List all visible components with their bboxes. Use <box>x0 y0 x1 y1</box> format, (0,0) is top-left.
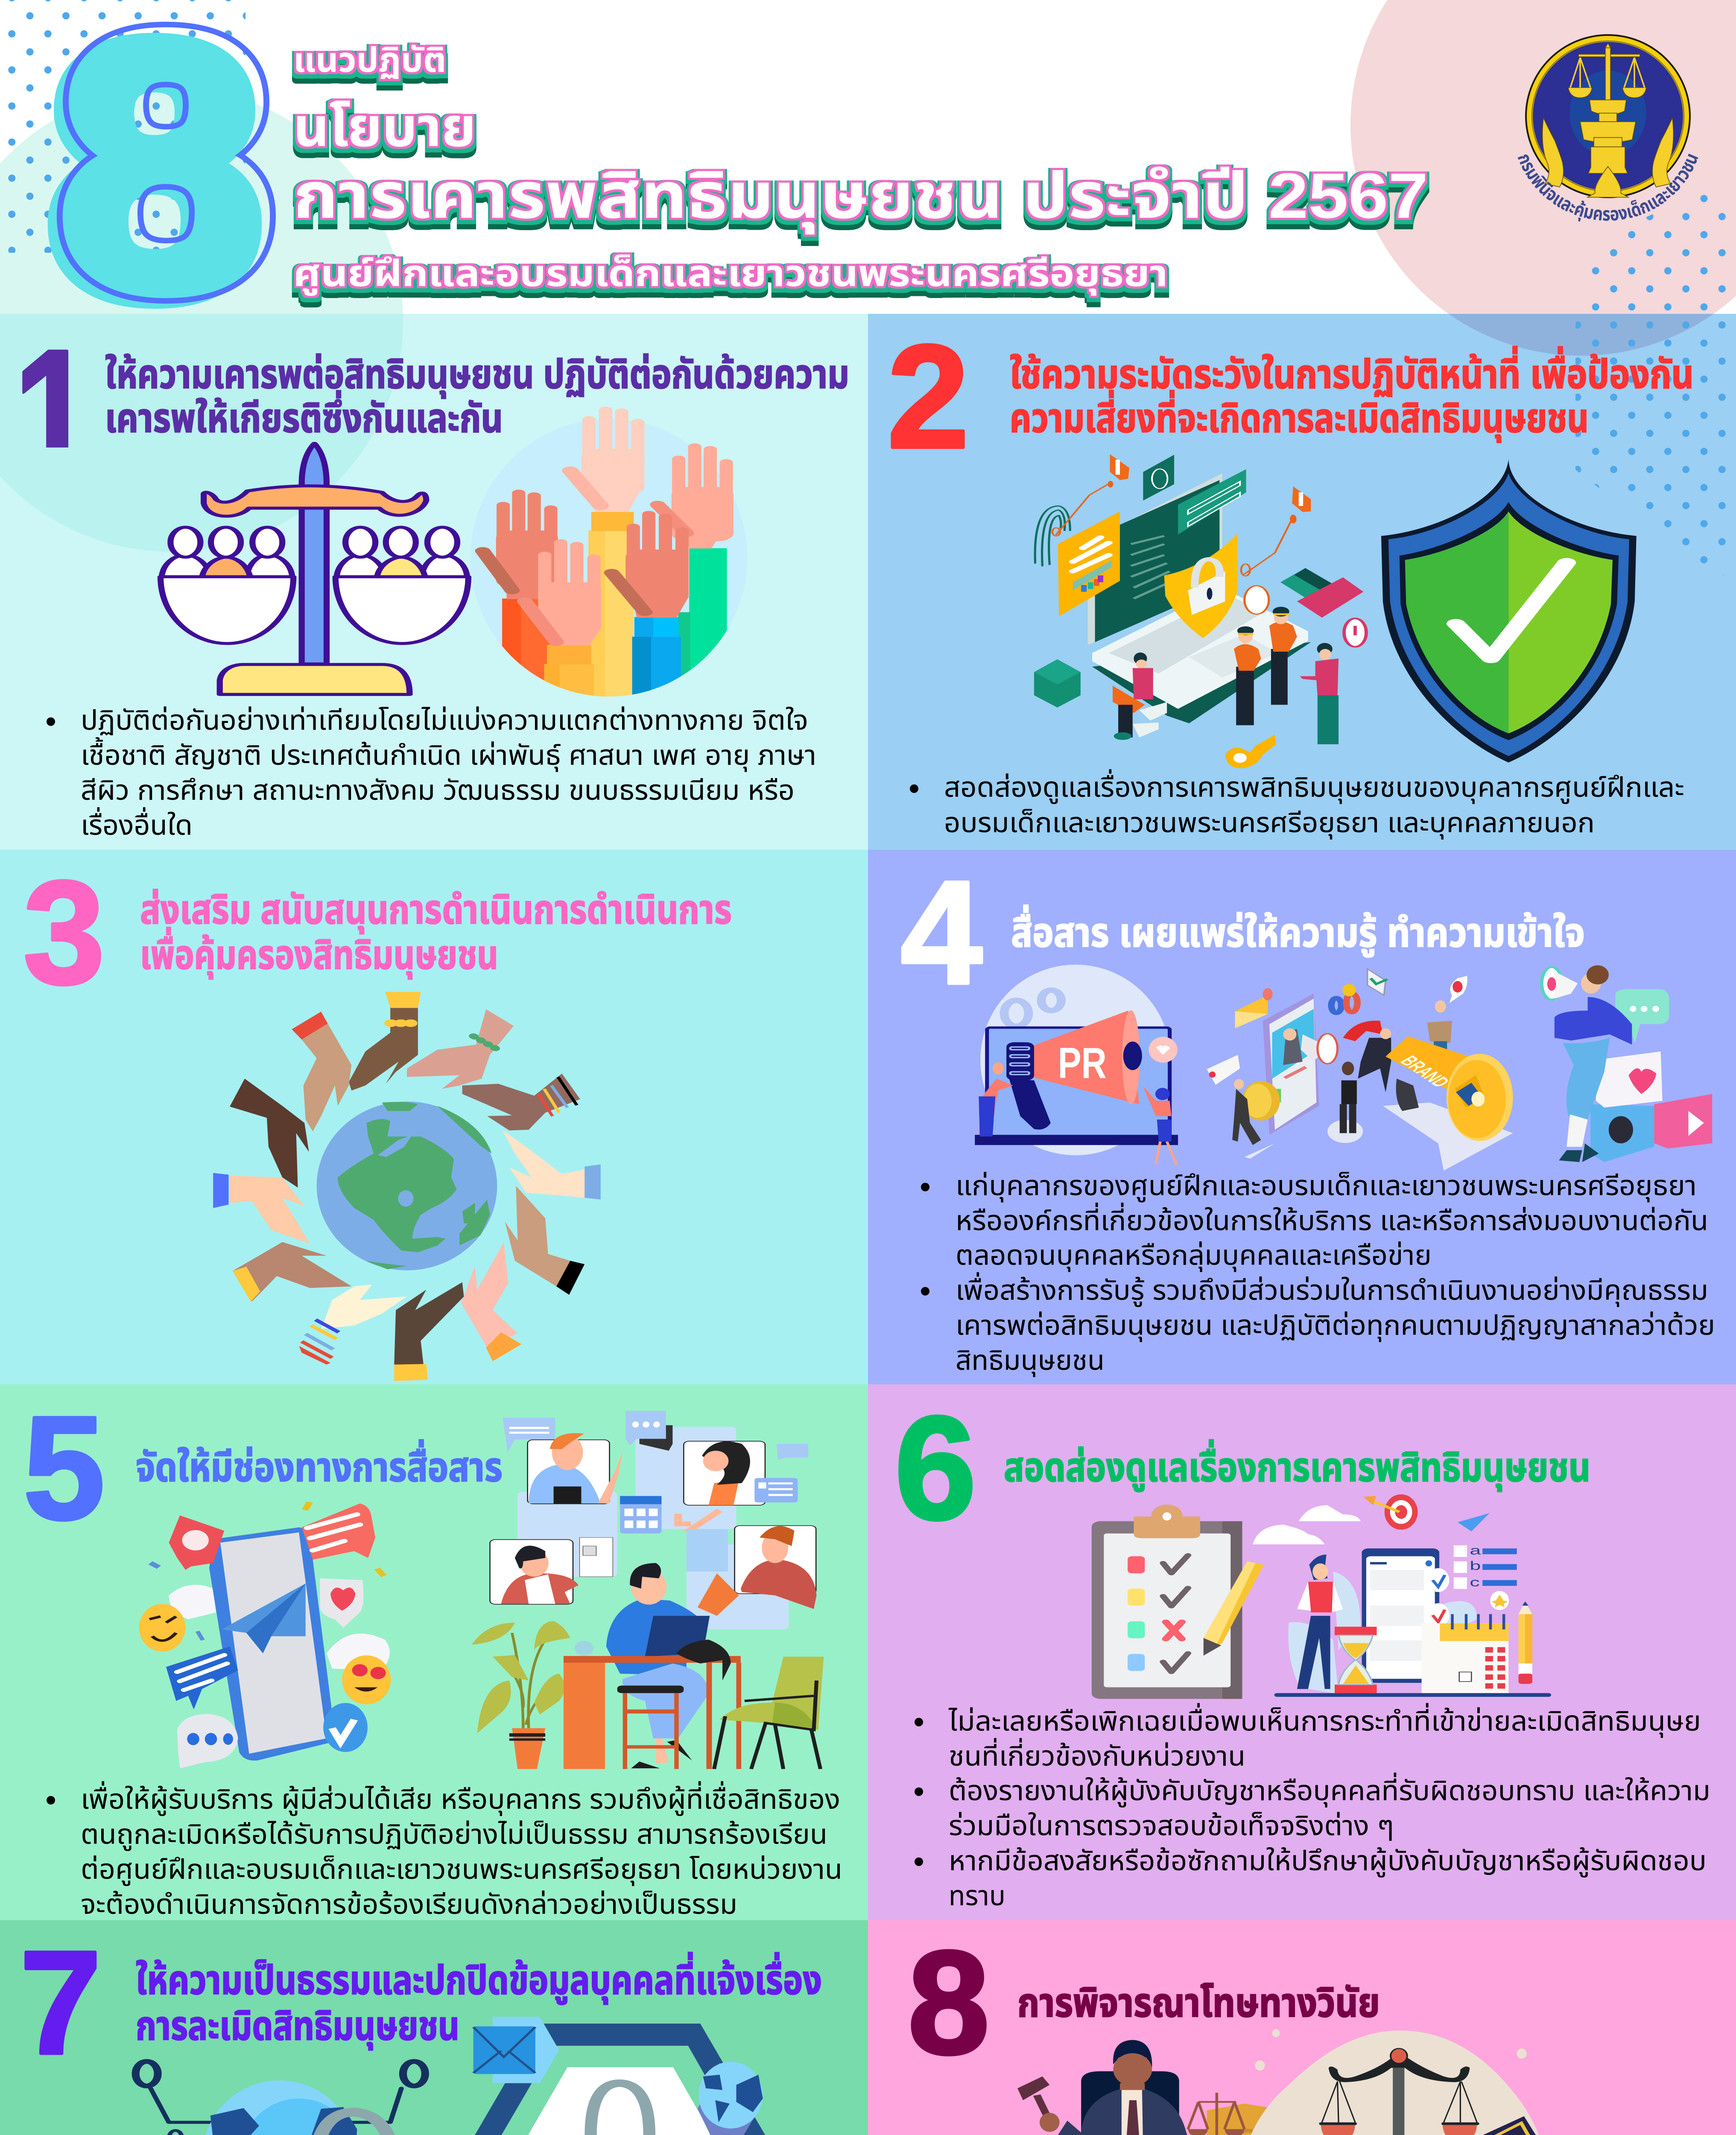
body text 2 <box>910 769 1684 839</box>
illustration: cyber security laptop <box>1034 454 1366 768</box>
body text 5: เพื่อให้ผู้รับบริการ ผู้มีส่วนได้เสีย หรือบุคลากร รวมถึงผู้ที่เชื่อสิทธิของ <box>81 1781 840 1816</box>
illustration: security hexagon with padlock <box>459 2017 780 2135</box>
number 1: 1 <box>14 311 94 521</box>
heading 2 <box>1010 346 1694 443</box>
body text 6: ร่วมมือในการตรวจสอบข้อเท็จจริงต่าง ๆ <box>949 1810 1394 1841</box>
plant <box>472 1621 570 1769</box>
illustration: clipboard checklist <box>1092 1504 1264 1699</box>
twelve hands <box>213 992 601 1381</box>
header banner <box>0 0 1736 552</box>
globe <box>317 1102 497 1270</box>
header main title: การเคารพสิทธิมนุษยชน ประจำปี 2567 <box>293 160 1428 234</box>
heading 8: การพิจารณาโทษทางวินัย <box>1017 1980 1380 2025</box>
body text 5: จะต้องดำเนินการจัดการข้อร้องเรียนดังกล่าวอย่างเป็นธรรม <box>81 1889 737 1920</box>
illustration: phone with social icons <box>139 1501 391 1768</box>
illustration: online meeting people <box>472 1411 824 1769</box>
illustration: man with phone, calendar and hourglass <box>1253 1494 1551 1697</box>
heading 7: ให้ความเป็นธรรมและปกปิดข้อมูลบุคคลที่แจ้งเรื่อง <box>136 1952 822 2005</box>
panel 2: caution <box>868 0 1736 850</box>
heading 3 <box>140 887 732 980</box>
body text 6: หากมีข้อสงสัยหรือข้อซักถามให้ปรึกษาผู้บังคับบัญชาหรือผู้รับผิดชอบ <box>949 1845 1707 1878</box>
illustration: judge at podium <box>1017 2040 1287 2135</box>
body text 5: ตนถูกละเมิดหรือได้รับการปฏิบัติอย่างไม่เป็นธรรม สามารถร้องเรียน <box>81 1819 827 1851</box>
panel 8: discipline <box>868 1920 1736 2135</box>
icon: department logo <box>1513 34 1703 225</box>
illustration: PR megaphone: PR <box>1058 1039 1107 1088</box>
option labels <box>1470 1544 1481 1589</box>
heading 1: ให้ความเคารพต่อสิทธิมนุษยชน ปฏิบัติต่อกันด้วยความ <box>105 352 849 399</box>
header title line: แนวปฏิบัติ: แนวปฏิบัติ <box>293 41 446 79</box>
body text 1: เชื้อชาติ สัญชาติ ประเทศต้นกำเนิด เผ่าพันธุ์ ศาสนา เพศ อายุ ภาษา <box>81 737 816 772</box>
heading 7 <box>136 1952 822 2050</box>
body text 6: ต้องรายงานให้ผู้บังคับบัญชาหรือบุคคลที่รับผิดชอบทราบ และให้ความ <box>949 1772 1710 1807</box>
illustration: law books, scales and gavel <box>1231 2029 1702 2135</box>
body text 1: เรื่องอื่นใด <box>81 807 193 841</box>
body text 6 <box>915 1703 1710 1911</box>
body text 4 <box>921 1170 1715 1377</box>
number 8: 8 <box>908 1921 990 2085</box>
heading 1 <box>105 352 849 441</box>
number 4: 4 <box>900 851 983 1015</box>
number 6: 6 <box>894 1386 976 1550</box>
body text 4: หรือองค์กรที่เกี่ยวข้องในการให้บริการ และหรือการส่งมอบงานต่อกัน <box>956 1202 1708 1236</box>
body text 4: สิทธิมนุษยชน <box>956 1345 1105 1377</box>
icon: green shield with check mark <box>1381 459 1637 763</box>
body text 4: ตลอดจนบุคคลหรือกลุ่มบุคคลและเครือข่าย <box>956 1240 1432 1272</box>
body text 6: ไม่ละเลยหรือเพิกเฉยเมื่อพบเห็นการกระทำที่เข้าข่ายละเมิดสิทธิมนุษย <box>948 1703 1701 1738</box>
heading 6: สอดส่องดูแลเรื่องการเคารพสิทธิมนุษยชน <box>1004 1439 1590 1492</box>
illustration: hands around the earth <box>213 992 601 1381</box>
icon: raised diverse hands <box>471 407 747 699</box>
number 2: 2 <box>887 315 969 479</box>
body text 4: แก่บุคลากรของศูนย์ฝึกและอบรมเด็กและเยาวชนพระนครศรีอยุธยา <box>956 1170 1697 1202</box>
body text 1: ปฏิบัติต่อกันอย่างเท่าเทียมโดยไม่แบ่งความแตกต่างทางกาย จิตใจ <box>81 705 808 736</box>
panel 7: fairness and privacy <box>0 1920 868 2135</box>
panel 1: respect <box>0 314 868 850</box>
panel 5: channels <box>0 1384 868 1920</box>
heading 3: ส่งเสริม สนับสนุนการดำเนินการดำเนินการ <box>140 887 732 934</box>
number 5: 5 <box>23 1386 105 1550</box>
header subtitle: ศูนย์ฝึกและอบรมเด็กและเยาวชนพระนครศรีอยุธยา <box>293 253 1168 296</box>
icon: balance scale with people <box>161 443 468 694</box>
option labels: c <box>1470 1576 1480 1589</box>
heading 7: การละเมิดสิทธิมนุษยชน <box>136 2003 459 2050</box>
body text 1 <box>47 705 816 841</box>
body text 4: เคารพต่อสิทธิมนุษยชน และปฏิบัติต่อทุกคนตามปฏิญญาสากลว่าด้วย <box>956 1310 1715 1342</box>
body text 6: ชนที่เกี่ยวข้องกับหน่วยงาน <box>949 1738 1245 1772</box>
illustration: globe network with padlock <box>126 2062 435 2135</box>
BRAND label: BRAND <box>1395 1053 1454 1091</box>
body text 2: อบรมเด็กและเยาวชนพระนครศรีอยุธยา และบุคคลภายนอก <box>944 807 1595 839</box>
heading 2: ความเสี่ยงที่จะเกิดการละเมิดสิทธิมนุษยชน <box>1010 390 1589 443</box>
panel 4: communicate <box>868 850 1736 1384</box>
body text 5: ต่อศูนย์ฝึกและอบรมเด็กและเยาวชนพระนครศรีอยุธยา โดยหน่วยงาน <box>81 1854 842 1886</box>
body text 1: สีผิว การศึกษา สถานะทางสังคม วัฒนธรรม ขนบธรรมเนียม หรือ <box>81 775 795 806</box>
logo caption: กรมพินิจและคุ้มครองเด็กและเยาวชน <box>1513 150 1703 225</box>
option labels: b <box>1470 1559 1481 1573</box>
body text 4: เพื่อสร้างการรับรู้ รวมถึงมีส่วนร่วมในการดำเนินงานอย่างมีคุณธรรม <box>956 1272 1708 1307</box>
body text 6: ทราบ <box>949 1881 1005 1911</box>
body text 5 <box>47 1781 842 1920</box>
body text 2: สอดส่องดูแลเรื่องการเคารพสิทธิมนุษยชนของบุคลากรศูนย์ฝึกและ <box>944 769 1684 804</box>
heading 5: จัดให้มีช่องทางการสื่อสาร <box>136 1439 503 1490</box>
panel 3: promote <box>0 850 868 1384</box>
heading 4: สื่อสาร เผยแพร่ให้ความรู้ ทำความเข้าใจ <box>1011 905 1585 957</box>
panel 6: monitor <box>868 1384 1736 1920</box>
illustration: woman with megaphone and social cubes <box>1542 965 1712 1162</box>
number 3: 3 <box>23 851 105 1015</box>
option labels: a <box>1470 1544 1481 1557</box>
heading 1: เคารพให้เกียรติซึ่งกันและกัน <box>105 390 503 441</box>
chair <box>714 1657 824 1769</box>
illustration: PR megaphone <box>975 965 1178 1165</box>
header title line: นโยบาย: นโยบาย <box>293 97 476 158</box>
illustration: brand megaphone team <box>1207 969 1513 1170</box>
heading 3: เพื่อคุ้มครองสิทธิมนุษยชน <box>140 927 498 980</box>
number 7: 7 <box>20 1921 102 2085</box>
man at desk <box>564 1563 741 1769</box>
